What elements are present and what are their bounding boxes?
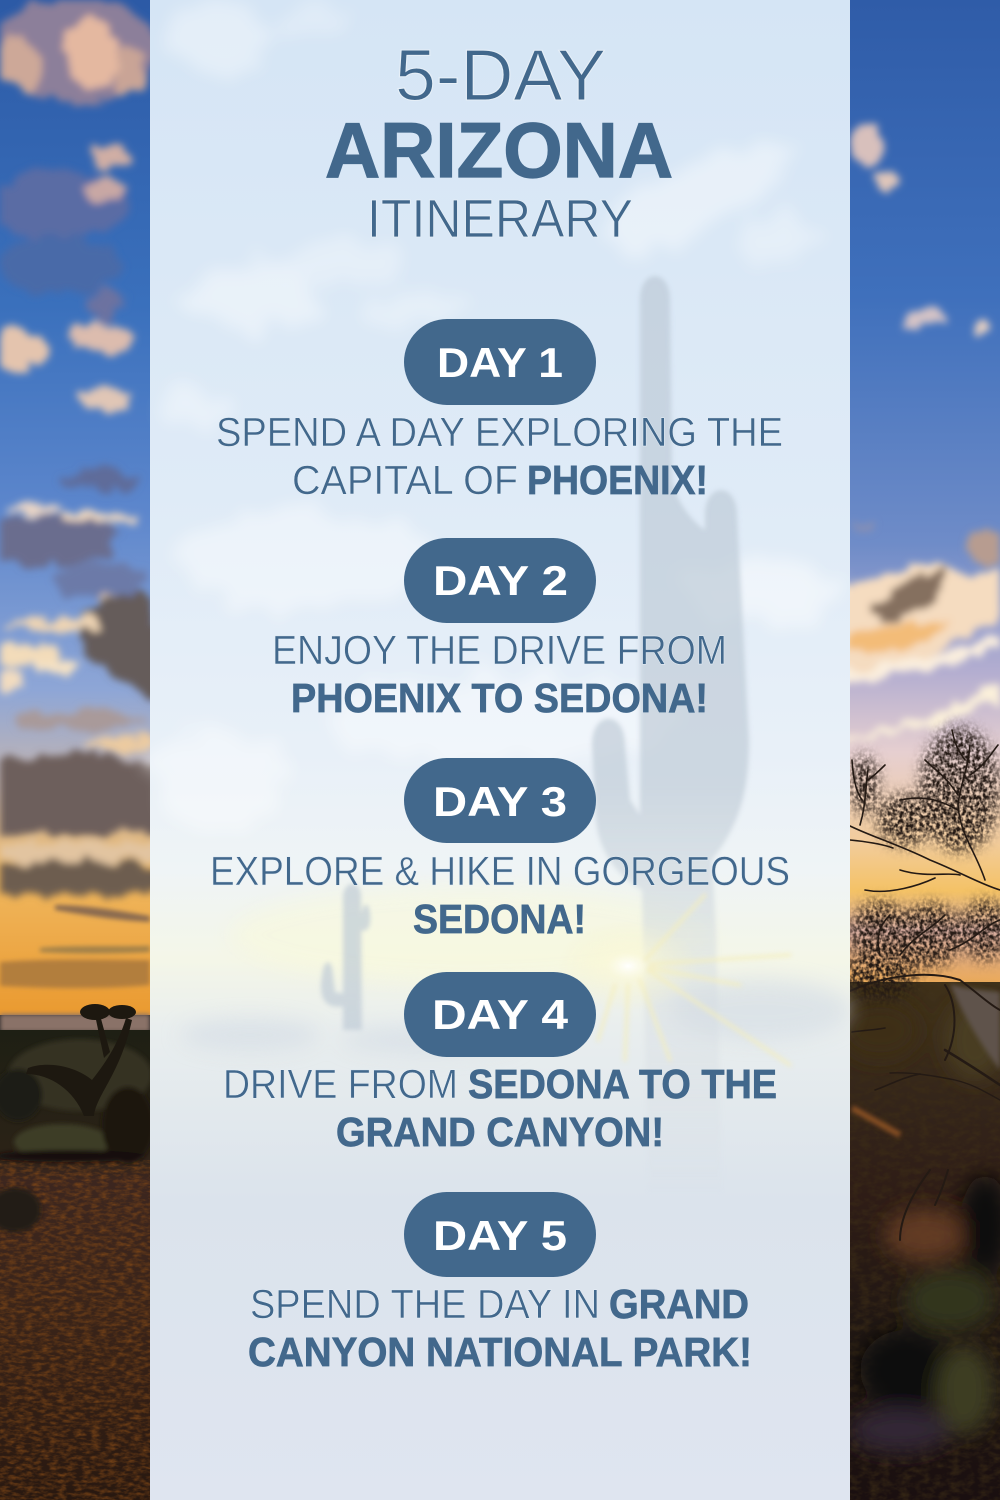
- day 3 text: EXPLORE & HIKE IN GORGEOUS: [210, 848, 790, 894]
- day 5 text: [248, 1281, 752, 1375]
- ground: [850, 982, 1000, 1500]
- main saguaro cactus, faded: [592, 276, 749, 1190]
- title: [325, 36, 673, 249]
- translucent white centre panel with faded photo: [150, 0, 850, 1500]
- sky: [0, 0, 150, 1015]
- sunbeams: [598, 895, 790, 1065]
- day 1 badge: [404, 319, 596, 405]
- shrubs: [0, 1039, 154, 1232]
- day 1 text: CAPITAL OF: [292, 457, 518, 503]
- day 3 badge: DAY 3: [433, 778, 567, 825]
- tree silhouette: [26, 1004, 136, 1116]
- horizon streaks: [0, 905, 150, 1032]
- background photo: left strip: [0, 0, 170, 1500]
- day 4 badge: [404, 972, 596, 1057]
- day 5 badge: [404, 1192, 596, 1277]
- day 3 badge: [404, 758, 596, 843]
- day 2: [272, 538, 727, 721]
- day 4 text: [223, 1061, 777, 1155]
- day 5 badge: DAY 5: [433, 1212, 567, 1259]
- warm glow at horizon: [230, 885, 710, 985]
- title: ITINERARY: [367, 189, 633, 249]
- day 2 text: [272, 627, 727, 721]
- small distant saguaro, faded: [321, 884, 370, 1030]
- sun glow: [558, 921, 698, 1011]
- day 5: [248, 1192, 752, 1375]
- small upper clouds: [852, 123, 1000, 566]
- faded clouds: [150, 2, 840, 830]
- shrub shadows and highlights: [840, 1000, 1000, 1452]
- day 3: [210, 758, 790, 942]
- day 2 badge: DAY 2: [433, 557, 568, 604]
- mid clouds: [0, 503, 170, 754]
- day 5 text: CANYON NATIONAL PARK!: [248, 1329, 752, 1375]
- sunset cloud bank: [830, 560, 1000, 740]
- panel base: [150, 0, 850, 1500]
- day 4 badge: DAY 4: [432, 991, 569, 1038]
- day 2 badge: [404, 538, 596, 623]
- title: 5-DAY: [395, 36, 606, 116]
- day 2 text: ENJOY THE DRIVE FROM: [272, 627, 727, 673]
- day 3 text: SEDONA!: [413, 896, 586, 942]
- tree branches: [850, 730, 1000, 1240]
- sky: [850, 0, 1000, 990]
- day 1: [216, 319, 783, 503]
- background photo: right strip: [830, 0, 1000, 1500]
- right bush texture: [850, 985, 1000, 1500]
- ground grass texture: [0, 1160, 150, 1500]
- day 5 text: GRAND: [609, 1281, 749, 1327]
- day 1 text: PHOENIX!: [527, 457, 708, 503]
- tree canopy texture: [844, 728, 1000, 1001]
- day 1 badge: DAY 1: [437, 339, 563, 386]
- day 2 text: PHOENIX TO SEDONA!: [291, 675, 708, 721]
- ground: [0, 1030, 150, 1500]
- upper clouds: [0, 0, 160, 489]
- day 5 text: SPEND THE DAY IN: [250, 1281, 600, 1327]
- faded horizon scrub: [180, 980, 850, 1054]
- day 1 text: [216, 409, 783, 503]
- title: ARIZONA: [325, 106, 673, 194]
- day 4 text: SEDONA TO THE: [468, 1061, 777, 1107]
- distant hill: [950, 984, 1000, 1070]
- day 4: [223, 972, 777, 1155]
- day 4 text: GRAND CANYON!: [336, 1109, 664, 1155]
- day 3 text: [210, 848, 790, 942]
- day 4 text: DRIVE FROM: [223, 1061, 458, 1107]
- low dark cloud bands: [0, 755, 170, 896]
- day 1 text: SPEND A DAY EXPLORING THE: [216, 409, 783, 455]
- orange light streak: [852, 1108, 900, 1135]
